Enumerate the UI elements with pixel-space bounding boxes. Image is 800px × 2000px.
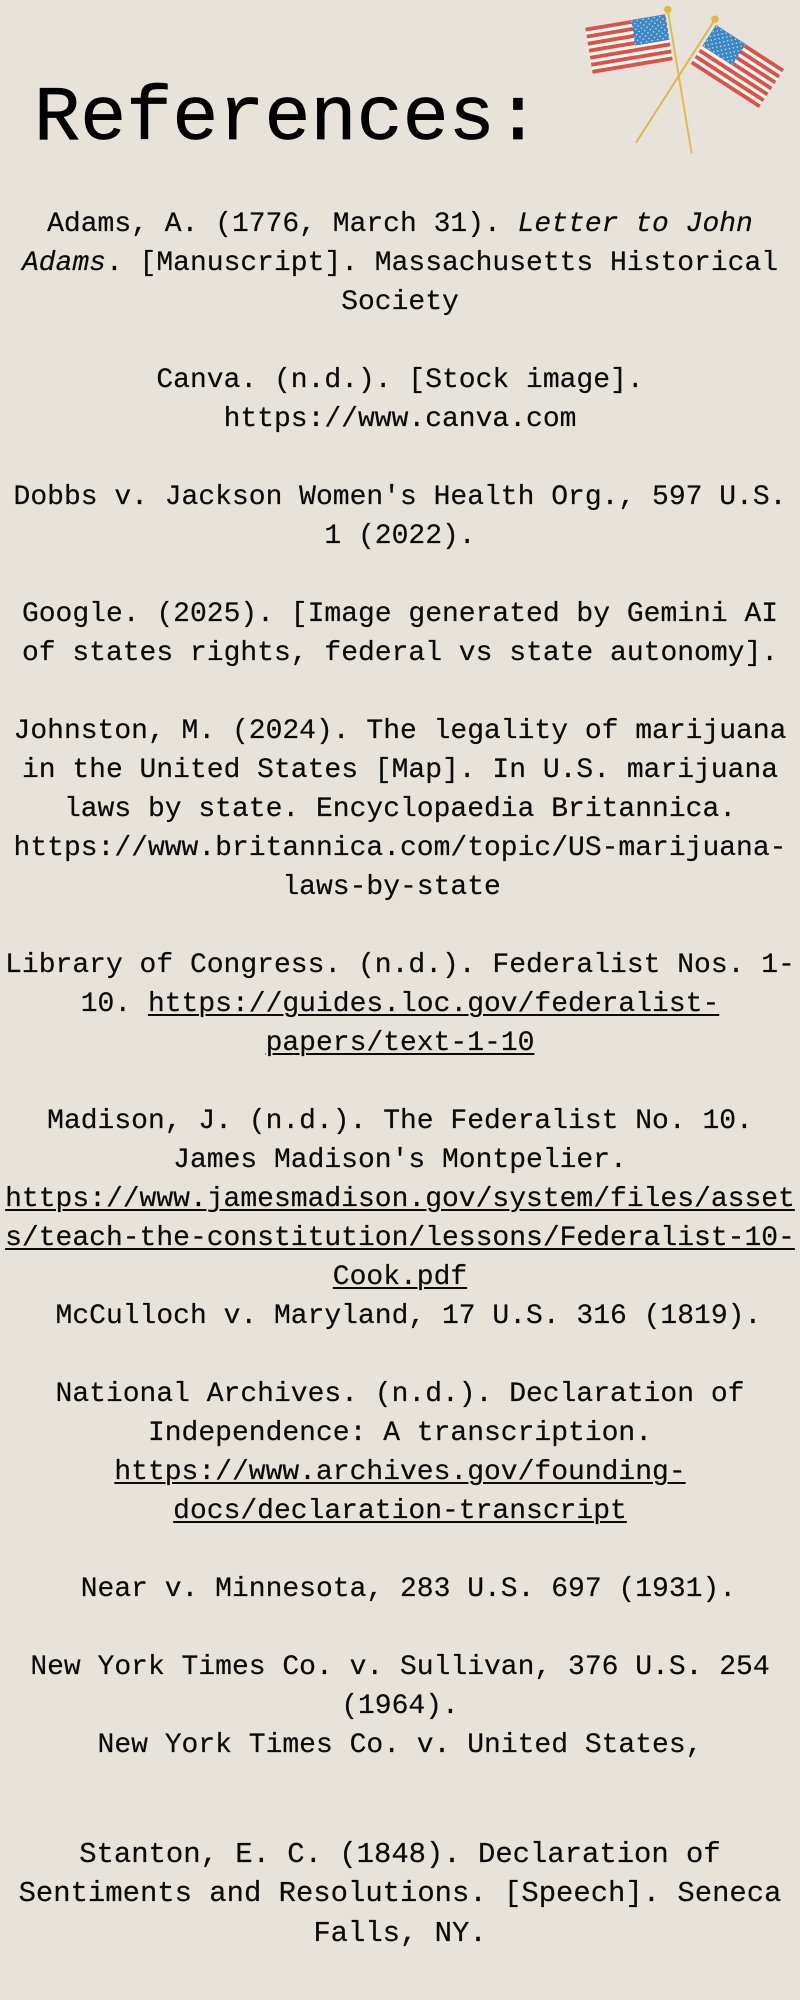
reference: Google [22,598,778,668]
flag: right [636,15,784,143]
reference: Stanton [19,1838,781,1950]
reference: Madison: https://www.jamesmadison.gov/system/files/asset [5,1184,795,1214]
reference: Dobbs [14,482,786,552]
icon: crossed American flags [585,6,784,154]
reference: Johnston: laws by state. Encyclopaedia Britannica. [64,794,736,824]
reference: Madison: s/teach-the-constitution/lessons/Federalist-10- [5,1222,795,1254]
reference: McCulloch: McCulloch v. Maryland, 17 U.S. 316 (1819). [56,1300,761,1332]
reference: Adams: Adams. [Manuscript]. Massachusetts Historical [22,248,778,278]
reference: National Archives [56,1378,744,1526]
reference: Madison: Cook.pdf [333,1262,467,1292]
reference: Johnston: laws-by-state [282,872,501,902]
reference: Stanton: Sentiments and Resolutions. [Speech]. Seneca [19,1877,781,1910]
reference: National Archives: Independence: A transcription. [148,1418,652,1448]
reference: Adams: Adams, A. (1776, March 31). Letter to John [47,208,753,240]
reference: Library of Congress: 10. https://guides.loc.gov/federalist- [81,988,719,1020]
reference: Stanton: Stanton, E. C. (1848). Declaration of [79,1838,721,1870]
reference: Stanton: Falls, NY. [313,1916,487,1950]
reference: Madison [5,1106,795,1292]
reference: National Archives: https://www.archives.gov/founding- [114,1456,686,1488]
reference: Johnston: https://www.britannica.com/topic/US-marijuana- [14,832,786,864]
reference: New York Times v. Sullivan: (1964). [341,1690,459,1722]
reference: Madison: James Madison's Montpelier. [173,1144,627,1176]
reference: National Archives: National Archives. (n.d.). Declaration of [56,1378,744,1410]
reference: National Archives: docs/declaration-transcript [173,1496,627,1526]
title: References: [34,76,541,163]
reference: Library of Congress: papers/text-1-10 [266,1028,534,1058]
reference: Library of Congress: Library of Congress. (n.d.). Federalist Nos. 1- [5,950,795,980]
reference: Canva: https://www.canva.com [224,404,576,434]
reference: Madison: Madison, J. (n.d.). The Federalist No. 10. [47,1106,753,1136]
reference: New York Times v. United States: New York Times Co. v. United States, [98,1730,702,1760]
reference: Adams [20,208,778,318]
reference: Johnston [14,716,786,902]
reference: Google: of states rights, federal vs state autonomy]. [22,638,778,668]
reference: Canva [156,364,644,434]
reference: Johnston: in the United States [Map]. In U.S. marijuana [22,754,778,786]
reference: Johnston: Johnston, M. (2024). The legality of marijuana [14,716,786,746]
reference: Near: Near v. Minnesota, 283 U.S. 697 (1931). [81,1574,736,1604]
reference: New York Times v. Sullivan: New York Times Co. v. Sullivan, 376 U.S. 254 [30,1652,770,1682]
reference: Dobbs: 1 (2022). [324,520,476,552]
reference: Library of Congress [5,950,795,1058]
reference: Dobbs: Dobbs v. Jackson Women's Health Org., 597 U.S. [14,482,786,512]
reference: Adams: Society [341,286,459,318]
reference: Canva: Canva. (n.d.). [Stock image]. [156,364,644,396]
flag: left [585,6,692,154]
reference: New York Times v. Sullivan [30,1652,770,1722]
reference: Google: Google. (2025). [Image generated by Gemini AI [22,598,778,630]
